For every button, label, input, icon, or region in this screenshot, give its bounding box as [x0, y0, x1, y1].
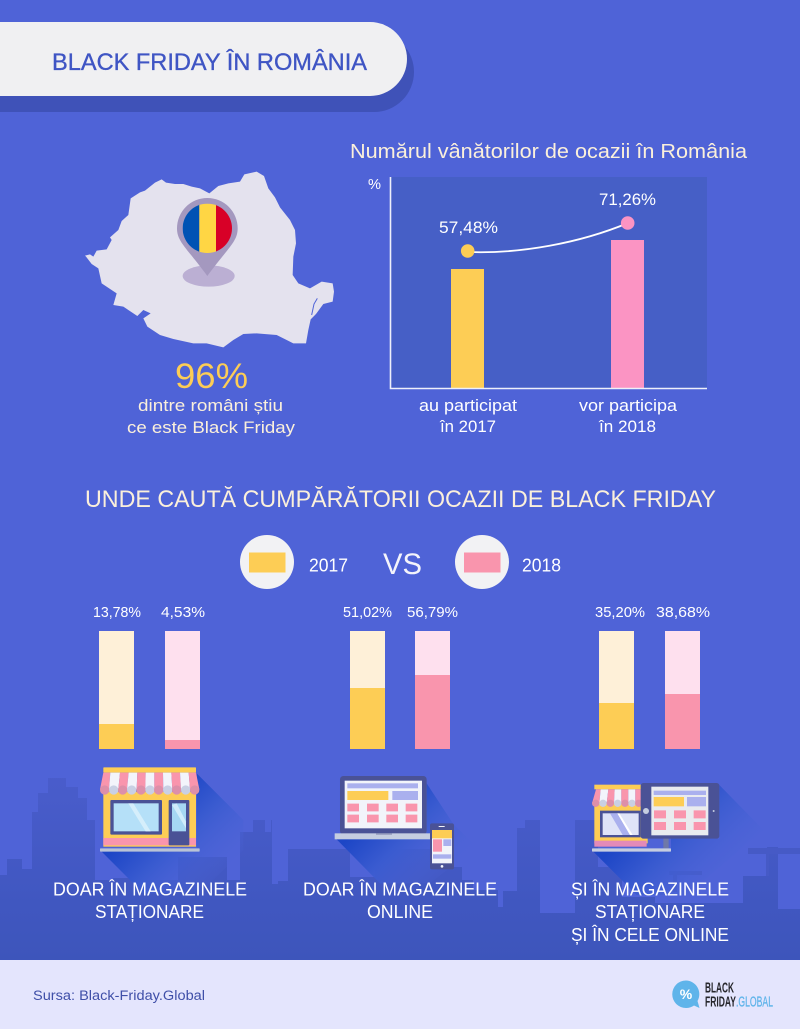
label: stationary stores: DOAR ÎN MAGAZINELE	[53, 880, 247, 900]
legend: VS	[383, 548, 422, 581]
bars: both store types	[595, 604, 710, 749]
legend: 2017	[309, 554, 348, 576]
bars: stationary stores: 13,78%	[93, 604, 141, 621]
stat caption	[127, 396, 296, 437]
label: both	[571, 880, 729, 945]
bars: online stores	[343, 604, 458, 749]
stat: 96%: 96%	[175, 357, 248, 396]
logo: .GLOBAL	[736, 994, 773, 1011]
stat caption: dintre români știu	[138, 396, 283, 415]
label: online stores	[303, 880, 497, 922]
label: online stores: DOAR ÎN MAGAZINELE	[303, 880, 497, 900]
logo: FRIDAY	[705, 994, 736, 1011]
crane right	[669, 848, 800, 892]
map of Romania with flag pin	[85, 172, 334, 347]
chart heading: Numărul vânătorilor de ocazii în România	[350, 141, 748, 163]
source: Sursa: Black-Friday.Global	[33, 988, 205, 1003]
bars: online stores: 56,79%	[407, 604, 458, 621]
section heading: UNDE CAUTĂ CUMPĂRĂTORII OCAZII DE BLACK FRIDAY	[85, 486, 716, 513]
bar chart: hunters: 71,26%	[599, 190, 656, 209]
bars: stationary stores: 4,53%	[161, 604, 205, 621]
label: stationary stores: STAȚIONARE	[95, 902, 204, 922]
bars: both store types: 35,20%	[595, 604, 645, 621]
bar chart: hunters: 57,48%	[439, 218, 498, 237]
bar chart: hunters: în 2017	[439, 417, 496, 436]
bar chart: hunters: %	[368, 176, 381, 193]
label: both: STAȚIONARE	[595, 902, 705, 922]
icon: shop and tablet	[592, 783, 763, 895]
panel: Romania map	[85, 172, 334, 437]
bar chart: hunters: vor participa	[579, 396, 678, 415]
logo	[672, 980, 773, 1011]
city skyline	[0, 778, 800, 960]
stat caption: ce este Black Friday	[127, 418, 296, 437]
bar chart: hunters: în 2018	[598, 417, 656, 436]
label: both: ȘI ÎN MAGAZINELE	[571, 880, 729, 900]
bars: stationary stores	[93, 604, 205, 749]
legend	[240, 535, 561, 589]
logo: %	[680, 986, 693, 1002]
label: both: ȘI ÎN CELE ONLINE	[571, 925, 729, 945]
icon: shop	[100, 767, 243, 893]
icon: laptop and phone	[335, 776, 477, 883]
label: online stores: ONLINE	[367, 902, 433, 922]
bar chart: hunters: au participat	[419, 396, 517, 415]
footer	[0, 960, 800, 1029]
bars: online stores: 51,02%	[343, 604, 392, 621]
header banner	[0, 22, 414, 112]
bar chart: hunters	[368, 176, 707, 436]
legend: 2018	[522, 554, 561, 576]
label: stationary stores	[53, 880, 247, 922]
title: BLACK FRIDAY ÎN ROMÂNIA	[52, 49, 367, 76]
bars: both store types: 38,68%	[656, 604, 710, 621]
logo: BLACK	[705, 980, 734, 997]
